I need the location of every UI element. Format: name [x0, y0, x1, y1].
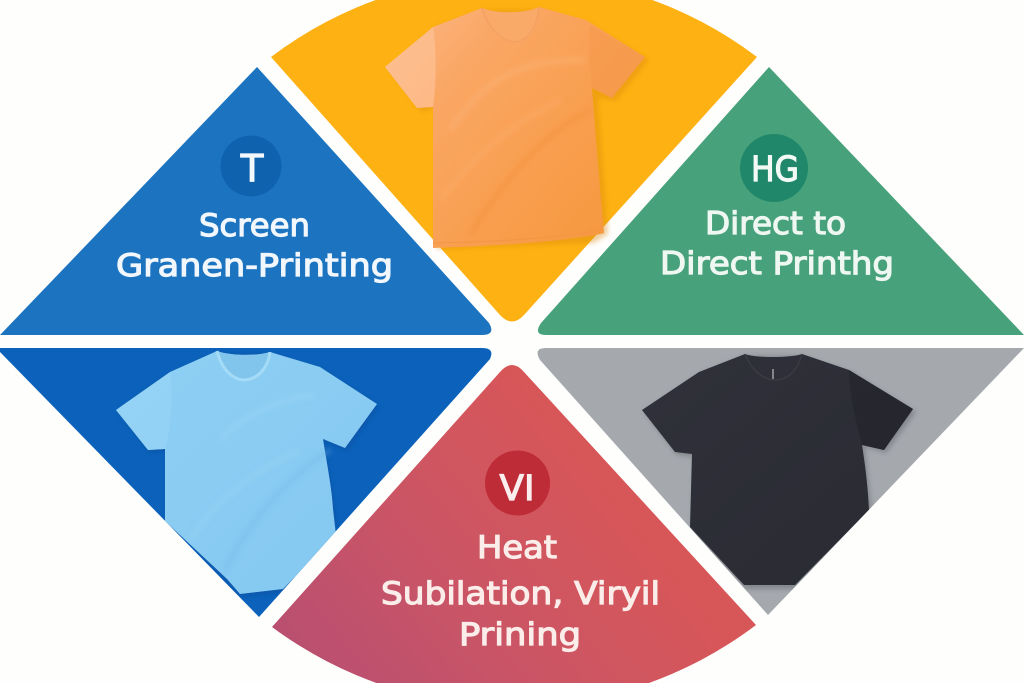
heading: direct printing label: Direct Printhg [660, 246, 894, 282]
heading: screen printing label: Granen-Printing [116, 248, 393, 284]
green triangle [538, 67, 1024, 335]
heading: screen printing label: Screen [199, 208, 310, 244]
heading: direct printing label [660, 206, 894, 282]
icon: T badge: T [240, 147, 264, 190]
panel: dark shirt [538, 348, 1024, 615]
panel: heat sublimation and vinyl printing [272, 365, 756, 683]
red sector [272, 365, 756, 683]
heading: screen printing label [116, 208, 393, 284]
gray triangle [538, 348, 1024, 615]
icon: HG badge: HG [751, 150, 799, 190]
heading: heat sublimation label: Heat [477, 530, 557, 566]
heading: direct printing label: Direct to [705, 206, 846, 242]
icon: T badge [220, 136, 282, 196]
icon: HG badge [740, 134, 808, 202]
illustration: black t-shirt [642, 354, 916, 589]
panel: orange shirt sector [271, 0, 757, 321]
illustration: orange t-shirt [385, 7, 649, 249]
heading: heat sublimation label: Subilation, Viryil [381, 576, 660, 612]
heading: heat sublimation label [381, 530, 660, 653]
icon: VI badge [485, 450, 550, 516]
panel: direct to garment printing [538, 67, 1024, 335]
panel: screen printing [0, 67, 491, 335]
yellow sector [271, 0, 757, 321]
illustration: light blue t-shirt [116, 351, 379, 597]
panel: light blue shirt [0, 348, 491, 617]
dark blue triangle [0, 348, 491, 617]
blue triangle [0, 67, 491, 335]
icon: VI badge: VI [500, 469, 534, 509]
heading: heat sublimation label: Prining [459, 617, 581, 653]
